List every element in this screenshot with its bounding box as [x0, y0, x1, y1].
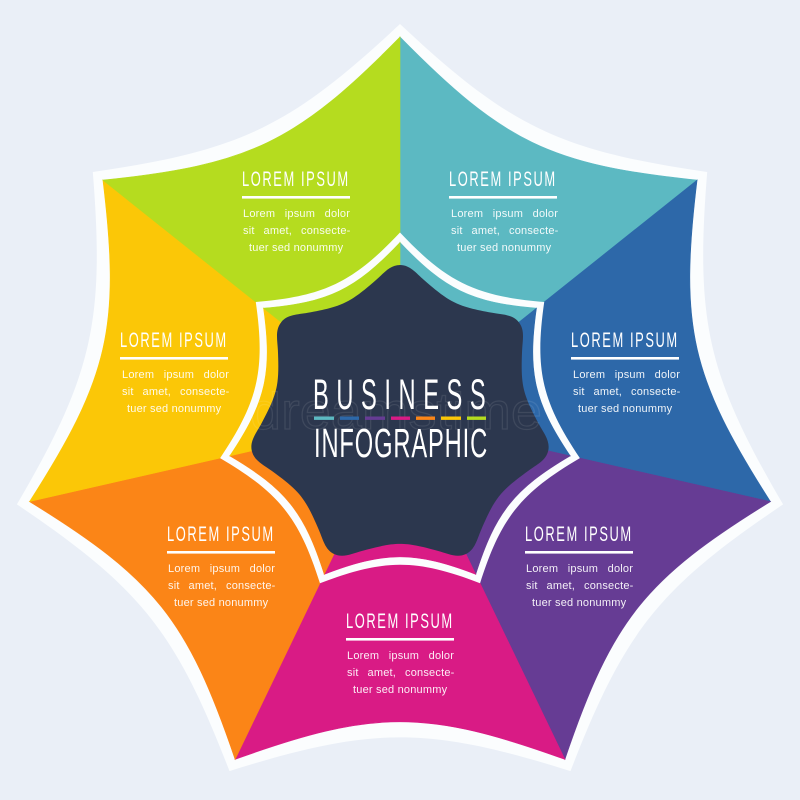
text block: purple segment: tuer sed nonummy — [532, 597, 627, 609]
title: business infographic: BUSINESS — [313, 372, 493, 419]
text block: purple segment — [525, 522, 634, 609]
text block: teal segment: tuer sed nonummy — [457, 242, 552, 254]
text block: green segment: Lorem ipsum dolor — [243, 208, 350, 220]
text block: magenta segment: Lorem ipsum dolor — [347, 650, 454, 662]
text block: yellow segment: LOREM IPSUM — [120, 328, 228, 352]
text block: purple segment: LOREM IPSUM — [525, 522, 633, 546]
central dark star — [251, 265, 549, 556]
text block: magenta segment — [346, 609, 455, 696]
inner white star outline — [220, 232, 580, 583]
text block: magenta segment: tuer sed nonummy — [353, 684, 448, 696]
text block: orange segment: LOREM IPSUM — [167, 522, 275, 546]
text block: blue segment — [571, 328, 681, 415]
text block: green segment: sit amet, consecte- — [243, 225, 351, 237]
text block: purple segment: sit amet, consecte- — [526, 580, 634, 592]
text block: teal segment: LOREM IPSUM — [449, 167, 557, 191]
text block: blue segment: sit amet, consecte- — [573, 386, 681, 398]
title: business infographic — [313, 372, 493, 467]
text block: yellow segment: Lorem ipsum dolor — [122, 369, 229, 381]
watermark: dreamstime — [250, 383, 542, 441]
text block: green segment: LOREM IPSUM — [242, 167, 350, 191]
text block: orange segment: Lorem ipsum dolor — [168, 563, 275, 575]
text block: blue segment: tuer sed nonummy — [578, 403, 673, 415]
title: business infographic: INFOGRAPHIC — [314, 422, 488, 467]
text block: yellow segment: tuer sed nonummy — [127, 403, 222, 415]
text block: magenta segment: LOREM IPSUM — [346, 609, 454, 633]
text block: yellow segment: sit amet, consecte- — [122, 386, 230, 398]
text block: green segment: tuer sed nonummy — [249, 242, 344, 254]
text block: orange segment: tuer sed nonummy — [174, 597, 269, 609]
text block: green segment — [242, 167, 351, 254]
text block: blue segment: Lorem ipsum dolor — [573, 369, 680, 381]
text block: teal segment: sit amet, consecte- — [451, 225, 559, 237]
inner coloured ring segments — [230, 242, 570, 574]
text block: teal segment — [449, 167, 559, 254]
text block: magenta segment: sit amet, consecte- — [347, 667, 455, 679]
text block: orange segment: sit amet, consecte- — [168, 580, 276, 592]
text block: blue segment: LOREM IPSUM — [571, 328, 679, 352]
text block: purple segment: Lorem ipsum dolor — [526, 563, 633, 575]
text block: teal segment: Lorem ipsum dolor — [451, 208, 558, 220]
text block: orange segment — [167, 522, 276, 609]
text block: yellow segment — [120, 328, 230, 415]
